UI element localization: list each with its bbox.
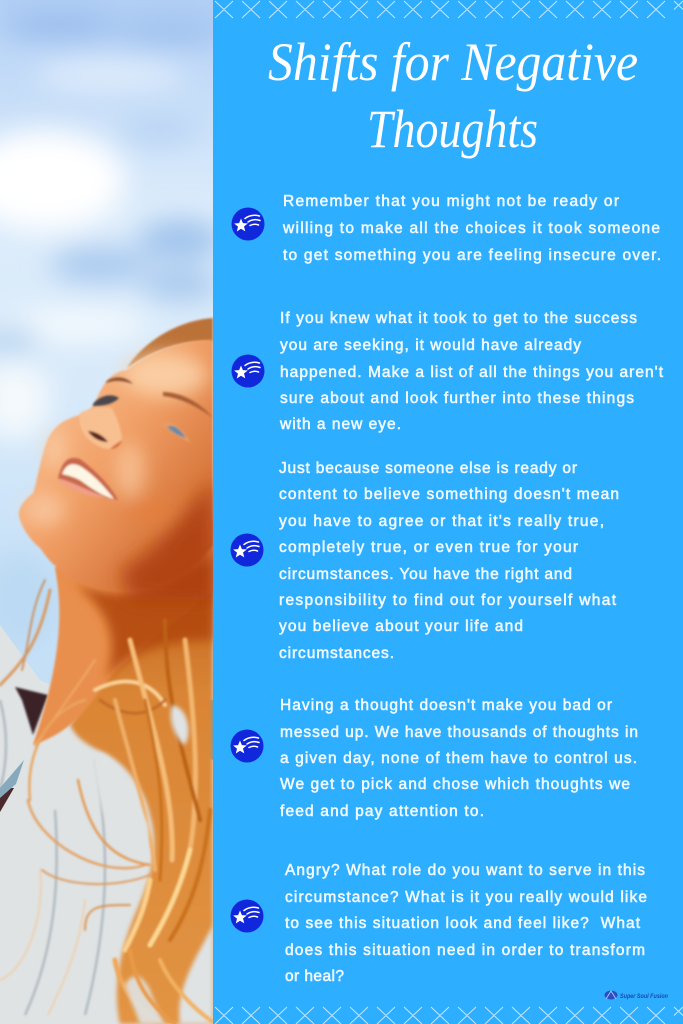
text: item 5: to see this situation look and feel like? What <box>285 915 641 932</box>
neck shadow <box>70 555 213 680</box>
text: item 2: with a new eye. <box>279 416 401 433</box>
text: item 3: circumstances. You have the right and <box>279 566 572 583</box>
text: item 1: to get something you are feeling insecure over. <box>283 247 661 264</box>
text: item 2: If you knew what it took to get to the success <box>280 310 637 327</box>
title: Shifts for Negative <box>268 32 638 92</box>
icon: shooting star <box>230 730 264 762</box>
text: item 5: or heal? <box>285 968 344 985</box>
text: item 4: Having a thought doesn't make you bad or <box>280 697 612 714</box>
text: item 2: happened. Make a list of all the things you aren't <box>280 364 664 381</box>
icon: shooting star <box>232 208 264 240</box>
text: item 2: sure about and look further into these things <box>280 390 634 407</box>
photo: smiling woman against a sky <box>0 0 225 1024</box>
smile <box>56 458 118 500</box>
shirt shadows <box>0 699 108 1016</box>
text: item 4: We get to pick and chose which thoughts we <box>280 776 630 793</box>
text: item 1: Remember that you might not be ready or <box>283 193 619 210</box>
top cross border <box>215 1 683 18</box>
nose <box>80 407 122 449</box>
shirt <box>0 625 213 1024</box>
text: item 1: willing to make all the choices it took someone <box>282 220 660 237</box>
icon: shooting star <box>230 900 264 932</box>
logo: Super Soul Fusion <box>620 994 668 1000</box>
text: item 3: responsibility to find out for yourself what <box>279 592 617 609</box>
hair strands <box>0 580 210 1024</box>
text: item 3: circumstances. <box>279 645 394 662</box>
text: item 4: feed and pay attention to. <box>280 803 484 820</box>
item 1 <box>232 193 666 264</box>
text: item 4: messed up. We have thousands of thoughts in <box>280 724 638 741</box>
sky background <box>0 0 225 700</box>
text: item 3: completely true, or even true for your <box>279 539 578 556</box>
title <box>268 32 638 159</box>
face shading <box>25 353 213 600</box>
face <box>19 340 213 591</box>
title: Thoughts <box>367 99 538 159</box>
text: item 5: Angry? What role do you want to serve in this <box>285 862 645 879</box>
text: item 3: Just because someone else is ready or <box>279 460 577 477</box>
icon: shooting star <box>232 354 264 388</box>
item 4 <box>230 697 643 820</box>
text: item 3: content to believe something doesn't mean <box>279 486 619 503</box>
icon: shooting star <box>230 534 264 566</box>
eyes and brows <box>93 377 213 443</box>
item 3 <box>230 460 624 662</box>
logo <box>604 990 668 1000</box>
text: item 3: you have to agree or that it's really true, <box>279 513 604 530</box>
bottom cross border <box>215 1007 683 1024</box>
neck <box>33 520 213 745</box>
text: item 4: a given day, none of them have to control us. <box>280 750 637 767</box>
text: item 2: you are seeking, it would have already <box>280 337 581 354</box>
lower hair strands <box>130 950 213 1024</box>
text: item 5: circumstance? What is it you really would like <box>285 889 647 906</box>
text: item 5: does this situation need in order to transform <box>285 942 645 959</box>
top hair <box>127 318 213 368</box>
shirt showing through hair <box>92 705 213 1024</box>
back hair mass <box>70 550 213 1024</box>
text: item 3: you believe about your life and <box>279 618 523 635</box>
collar <box>15 687 48 735</box>
item 2 <box>232 310 668 433</box>
